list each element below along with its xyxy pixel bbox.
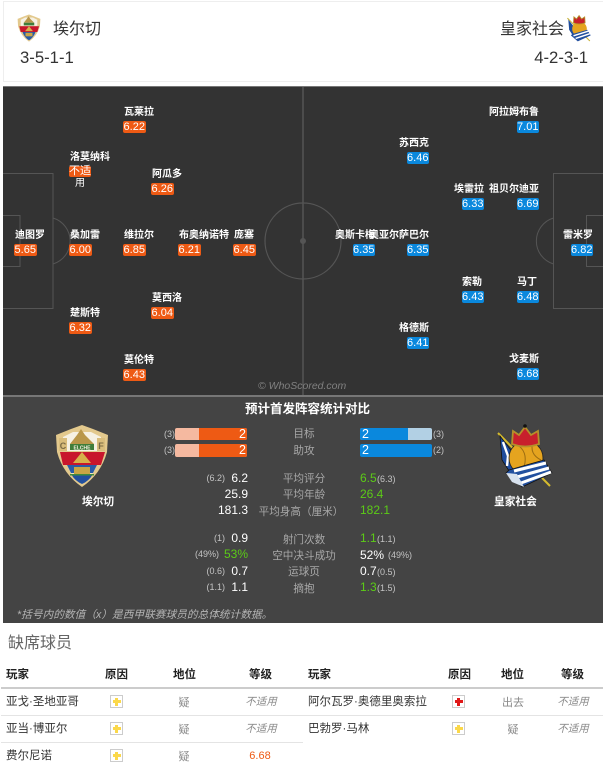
row: 巴勃罗·马林	[303, 722, 603, 736]
row: 亚戈·圣地亚哥: 不适用	[245, 696, 277, 708]
text: 6.85	[124, 244, 145, 256]
player: 莫西洛	[151, 292, 182, 319]
stat labels: 运球页	[288, 566, 320, 578]
player: 埃雷拉	[454, 182, 484, 210]
row: 亚当·博亚尔: 亚当·博亚尔	[6, 723, 67, 735]
home stat values: 25.9	[225, 487, 248, 501]
home stat values: 0.7	[231, 564, 248, 578]
row: 巴勃罗·马林: 疑	[508, 724, 518, 736]
player: 洛莫纳科	[69, 151, 110, 189]
home stat values: (0.6)	[206, 566, 225, 576]
table: away absentees	[303, 668, 603, 736]
bar: home assists: (3)	[164, 445, 175, 455]
text: 6.26	[152, 183, 173, 195]
home stat values: (1)	[214, 533, 225, 543]
table: home absentees: 等级	[249, 669, 272, 681]
text: 祖贝尔迪亚	[489, 184, 539, 195]
player: 莫伦特	[123, 354, 154, 381]
text: 6.69	[517, 198, 538, 210]
text: 6.35	[353, 244, 374, 256]
away stat values: 182.1	[360, 503, 390, 517]
player: 祖贝尔迪亚	[489, 183, 539, 210]
bar: home assists: 2	[239, 443, 246, 457]
text: 6.33	[462, 198, 483, 210]
player: 瓦莱拉	[123, 106, 154, 133]
text: 6.22	[124, 121, 145, 133]
table: away absentees: 等级	[561, 669, 584, 681]
text: 庞塞	[234, 230, 254, 241]
bar: home goals	[164, 427, 247, 441]
away stat values: (6.3)	[377, 474, 396, 484]
table: home absentees: 原因	[105, 669, 128, 681]
row: 费尔尼诺: 费尔尼诺	[6, 750, 52, 762]
text: 6.46	[407, 152, 428, 164]
home formation: 3-5-1-1	[20, 48, 74, 67]
text: 6.82	[571, 244, 592, 256]
home stat values: 53%	[224, 547, 248, 561]
bar: away assists: (2)	[433, 445, 444, 455]
away stat values: 26.4	[360, 487, 383, 501]
row: 阿尔瓦罗·奥德里奥索拉: 出去	[502, 697, 524, 709]
table: away absentees: 地位	[501, 669, 524, 681]
text: 阿瓜多	[152, 169, 182, 180]
player: 格德斯	[399, 322, 429, 349]
row: 阿尔瓦罗·奥德里奥索拉	[308, 695, 590, 709]
home team label: 埃尔切	[82, 496, 114, 508]
text: 马丁	[517, 277, 537, 288]
text: 迪图罗	[15, 230, 45, 241]
text: 6.00	[70, 244, 91, 256]
player: 阿拉姆布鲁	[489, 106, 539, 133]
row: 阿尔瓦罗·奥德里奥索拉: 阿尔瓦罗·奥德里奥索拉	[308, 696, 427, 708]
text: 5.65	[15, 244, 36, 256]
text: 6.41	[407, 337, 428, 349]
icon: Elche crest	[56, 425, 108, 487]
player: 阿瓜多	[151, 168, 182, 195]
icon: Elche crest: C	[60, 441, 67, 451]
bar: away goals: 2	[362, 427, 369, 441]
away stat values	[360, 471, 412, 594]
bar: away assists: 2	[362, 443, 369, 457]
text: 阿拉姆布鲁	[489, 107, 539, 118]
bar: home assists	[164, 443, 247, 457]
away stat values: 1.3	[360, 580, 377, 594]
row: 亚戈·圣地亚哥: 疑	[178, 697, 190, 709]
home stat values: (1.1)	[206, 582, 225, 592]
player: 桑加雷	[69, 229, 100, 256]
home stat values: (49%)	[195, 549, 219, 559]
stat labels: 目标	[293, 428, 315, 440]
away formation: 4-2-3-1	[534, 48, 588, 67]
row: 费尔尼诺: 6.68	[249, 750, 271, 762]
bar: home goals: 2	[239, 427, 246, 441]
icon: Elche crest: F	[98, 441, 104, 451]
text: 雷米罗	[563, 230, 593, 241]
table: away absentees: 原因	[448, 669, 471, 681]
home stat values: 0.9	[231, 531, 248, 545]
row: 阿尔瓦罗·奥德里奥索拉: 不适用	[557, 696, 589, 708]
home stat values: 6.2	[231, 471, 248, 485]
icon: Elche crest small	[18, 14, 40, 42]
player: 奥斯卡梅	[335, 229, 375, 256]
row: 亚当·博亚尔: 疑	[178, 724, 190, 736]
home stat values: (6.2)	[206, 473, 225, 483]
text: 瓦莱拉	[124, 107, 154, 118]
away stat values: 52%	[360, 548, 384, 562]
player: 戈麦斯	[509, 353, 539, 380]
text: 楚斯特	[70, 308, 100, 319]
stat labels: 射门次数	[283, 534, 325, 546]
player: 马丁	[517, 276, 539, 303]
stat labels: 平均年龄	[283, 489, 325, 501]
row: 费尔尼诺: 疑	[178, 751, 190, 763]
away team label: 皇家社会	[494, 496, 537, 508]
text: 6.68	[517, 368, 538, 380]
home stat values: 1.1	[231, 580, 248, 594]
away stat values: (49%)	[388, 550, 412, 560]
stat labels: 平均身高（厘米）	[259, 506, 343, 518]
away stat values: 1.1	[360, 531, 377, 545]
text: 6.35	[407, 244, 428, 256]
text: 格德斯	[399, 323, 429, 334]
text: 6.43	[462, 291, 483, 303]
text: 不适	[69, 165, 91, 177]
stat labels: 摘抱	[293, 583, 315, 595]
stat labels: 空中决斗成功	[272, 550, 336, 562]
player: 布奥纳诺特	[178, 229, 229, 256]
away stat values: (1.1)	[377, 534, 396, 544]
table: home absentees: 地位	[173, 669, 196, 681]
home team name: 埃尔切	[53, 21, 101, 38]
stat labels	[259, 428, 343, 595]
text: 6.43	[124, 369, 145, 381]
away stat values: 6.5	[360, 471, 377, 485]
bar: home goals: (3)	[164, 429, 175, 439]
text: 6.21	[179, 244, 200, 256]
row: 亚当·博亚尔: 不适用	[245, 723, 277, 735]
player: 迪图罗	[14, 229, 45, 256]
row: 巴勃罗·马林: 巴勃罗·马林	[308, 723, 369, 735]
icon: Elche crest: ELCHE	[74, 446, 91, 452]
player: 奥亚尔萨巴尔	[369, 229, 429, 256]
text: 7.01	[517, 121, 538, 133]
away stat values: (1.5)	[377, 583, 396, 593]
row: 亚戈·圣地亚哥	[6, 695, 278, 709]
player: 索勒	[462, 276, 484, 303]
player: 苏西克	[399, 137, 429, 164]
text: 布奥纳诺特	[179, 230, 229, 241]
stat labels: 助攻	[293, 445, 315, 457]
absentees heading: 缺席球员	[8, 635, 72, 652]
bar: away goals	[360, 427, 444, 441]
row: 巴勃罗·马林: 不适用	[557, 723, 589, 735]
text: 洛莫纳科	[70, 152, 110, 163]
player: 雷米罗	[563, 229, 593, 256]
player: 维拉尔	[123, 228, 154, 256]
text: 6.04	[152, 307, 173, 319]
row: 亚戈·圣地亚哥: 亚戈·圣地亚哥	[6, 696, 79, 708]
bar: away goals: (3)	[433, 429, 444, 439]
text: 维拉尔	[124, 230, 154, 241]
text: 奥亚尔萨巴尔	[369, 230, 429, 241]
table: home absentees	[1, 668, 303, 763]
text: 桑加雷	[70, 230, 100, 241]
away stat values: (0.5)	[377, 567, 396, 577]
text: 奥斯卡梅	[335, 230, 375, 241]
pitch markings	[3, 87, 603, 395]
home stat values: 181.3	[218, 503, 248, 517]
away team name: 皇家社会	[500, 21, 564, 38]
header: team names and formations	[3, 1, 603, 82]
icon: Real Sociedad crest	[497, 424, 552, 488]
text: 戈麦斯	[509, 354, 539, 365]
away stat values: 0.7	[360, 564, 377, 578]
icon: Real Sociedad crest small	[567, 14, 591, 42]
player: 庞塞	[233, 228, 256, 256]
home stat values	[195, 471, 248, 594]
text: 索勒	[462, 277, 482, 288]
player: 楚斯特	[69, 307, 100, 334]
table header: 玩家	[308, 669, 331, 681]
bar: away assists	[360, 443, 444, 457]
row: 费尔尼诺	[6, 749, 271, 763]
table header: 玩家	[6, 669, 29, 681]
text: 6.32	[70, 322, 91, 334]
text: 用	[75, 178, 85, 189]
text: 6.48	[517, 291, 538, 303]
panel: lineup stat comparison	[3, 395, 603, 623]
watermark: © WhoScored.com	[258, 380, 346, 392]
stats heading: 预计首发阵容统计对比	[245, 402, 370, 416]
panel: pitch	[3, 86, 603, 396]
stat labels: 平均评分	[283, 473, 325, 485]
text: 莫西洛	[152, 293, 182, 304]
text: 苏西克	[399, 138, 429, 149]
row: 亚当·博亚尔	[6, 722, 278, 736]
text: 埃雷拉	[454, 184, 484, 195]
text: 莫伦特	[124, 355, 154, 366]
text: 6.45	[234, 244, 255, 256]
footnote: *括号内的数值（x）是西甲联赛球员的总体统计数据。	[17, 609, 272, 621]
